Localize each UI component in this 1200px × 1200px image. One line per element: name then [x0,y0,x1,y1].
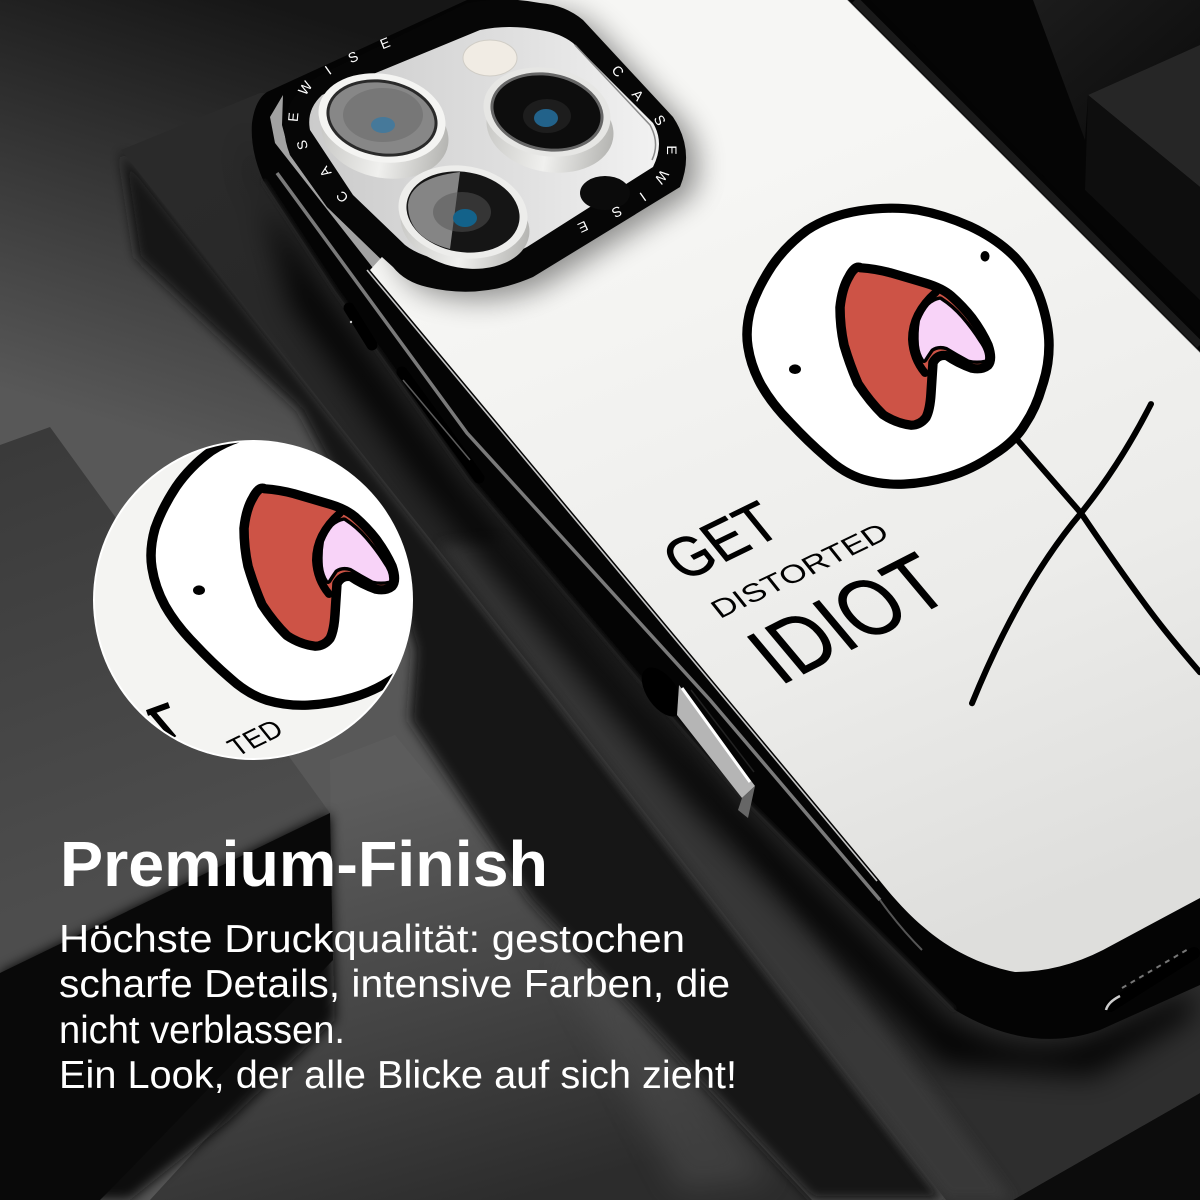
side button: long volume key [402,372,479,478]
brand ring lettering: CASEWISE right: W [651,167,672,188]
body copy: nicht verblassen. [59,1009,345,1052]
camera island shadow [312,8,698,300]
artwork: lettering DISTORTED: DISTORTED [704,517,895,624]
microphone hole [580,176,630,210]
brand ring lettering: CASEWISE left: C [333,188,351,206]
brand ring lettering: CASEWISE left: W [295,77,316,98]
brand ring lettering: CASEWISE left [285,34,392,206]
magnified face [146,442,411,710]
camera glass window [309,27,659,262]
side button: hole [349,308,372,345]
lens: top left [311,64,456,188]
brand ring lettering: CASEWISE left: E [378,34,392,52]
lens: top right [476,58,621,182]
camera island [284,0,686,292]
heading: Premium-Finish [60,828,548,900]
brand ring lettering: CASEWISE left: E [285,112,301,122]
magnified lettering: TED [221,714,289,762]
body copy: Höchste Druckqualität: gestochen [59,918,685,961]
phone shadow [244,129,1192,1076]
translucent rim strip [270,95,390,277]
artwork: lettering GET: GET [649,490,793,592]
side button: silver key [634,660,755,818]
brand ring lettering: CASEWISE right: I [637,189,649,205]
magnifier circle [93,440,413,760]
brand ring lettering: CASEWISE right: S [651,112,669,128]
magnified letter fragment [147,705,174,738]
body copy: scharfe Details, intensive Farben, die [59,963,730,1006]
body copy [59,918,737,1097]
brand ring lettering: CASEWISE right [575,62,680,236]
flash [463,40,517,76]
body copy: Ein Look, der alle Blicke auf sich zieht! [59,1054,737,1097]
side port: bottom speaker [1106,948,1194,1010]
brand ring lettering: CASEWISE right: E [664,145,680,155]
lens: bottom [391,155,536,279]
brand ring lettering: CASEWISE left: I [322,62,334,78]
phone case body [252,0,1200,1039]
brand ring lettering: CASEWISE right: E [575,218,591,236]
artwork: stick figure [747,208,1200,703]
brand ring lettering: CASEWISE right: A [629,86,648,104]
brand ring lettering: CASEWISE left: A [315,163,334,180]
brand ring lettering: CASEWISE left: S [293,138,311,152]
brand ring lettering: CASEWISE left: S [345,48,361,66]
brand ring lettering: CASEWISE right: C [609,62,627,80]
brand ring lettering: CASEWISE right: S [609,203,625,221]
artwork: lettering IDIOT: IDIOT [730,537,967,701]
phone back panel [370,0,1200,972]
